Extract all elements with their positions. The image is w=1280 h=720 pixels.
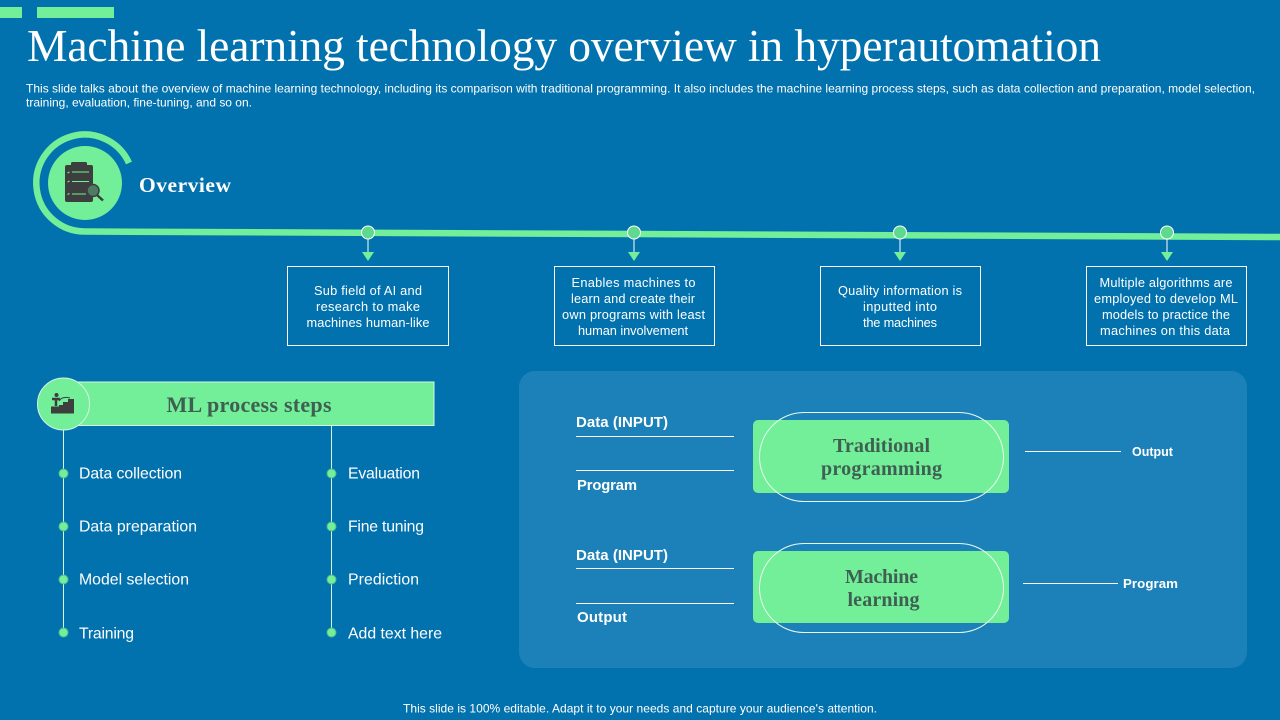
machine learning diagram: Output (577, 609, 627, 626)
steps column 2: Evaluation (348, 466, 420, 482)
traditional programming diagram: Data (INPUT) (576, 414, 668, 431)
machine learning diagram: Machine (845, 566, 918, 588)
description: training, evaluation, fine-tuning, and so on. (26, 96, 252, 110)
heading bar: ML process steps: ML process steps (166, 392, 332, 417)
timeline item 3 (820, 226, 980, 346)
timeline item 1 (288, 226, 448, 346)
timeline item 3: Quality information is (838, 283, 962, 298)
timeline item 2 (554, 226, 714, 346)
steps column 1: Model selection (79, 572, 189, 588)
timeline item 2: learn and create their (571, 291, 696, 306)
overview timeline line (36, 135, 1280, 237)
machine learning diagram: Data (INPUT) (576, 547, 668, 564)
timeline item 1: machines human-like (306, 315, 430, 330)
top accent bars (0, 7, 114, 18)
step lines (64, 426, 332, 632)
steps column 2: Fine tuning (348, 518, 424, 536)
footer note: This slide is 100% editable. Adapt it to your needs and capture your audience's attention. (403, 702, 877, 716)
description (26, 82, 1255, 110)
timeline item 3: the machines (863, 315, 937, 330)
traditional programming diagram (576, 412, 1174, 502)
timeline item 4: machines on this data (1100, 323, 1231, 338)
panel: comparison (519, 371, 1247, 668)
timeline item 1: research to make (316, 299, 420, 314)
traditional programming diagram: Program (577, 478, 637, 494)
traditional programming diagram: programming (821, 458, 942, 480)
timeline item 2: own programs with least (562, 307, 705, 322)
steps column 1: Training (79, 626, 134, 642)
steps column 1: Data collection (79, 466, 182, 482)
timeline item 1: Sub field of AI and (314, 283, 422, 298)
steps column 2 (327, 466, 442, 642)
heading bar: ML process steps (64, 382, 434, 426)
steps column 1 (59, 466, 197, 642)
machine learning diagram: learning (848, 589, 920, 611)
machine learning diagram: Program (1123, 576, 1178, 591)
traditional programming diagram: Output (1132, 445, 1174, 459)
timeline item 4 (1086, 226, 1246, 346)
icon: person climbing steps (38, 378, 90, 430)
icon: clipboard with magnifier (48, 146, 122, 220)
steps column 1: Data preparation (79, 518, 197, 536)
timeline item 4: employed to develop ML (1094, 291, 1238, 306)
timeline item 2: Enables machines to (572, 275, 696, 290)
steps column 2: Prediction (348, 572, 419, 588)
timeline item 4: Multiple algorithms are (1100, 275, 1232, 290)
traditional programming diagram: Traditional (833, 435, 930, 457)
panel: ML process steps (38, 378, 442, 642)
timeline item 3: inputted into (863, 299, 937, 314)
timeline item 4: models to practice the (1102, 307, 1230, 322)
timeline item 2: human involvement (578, 323, 688, 338)
heading: overview: Overview (139, 173, 231, 197)
steps column 2: Add text here (348, 626, 442, 642)
description: This slide talks about the overview of machine learning technology, including its comparison with traditional programming. It also includes the machine learning process steps, such as data collection and preparation, model selection, (26, 82, 1255, 96)
title: Machine learning technology overview in hyperautomation (27, 20, 1101, 71)
machine learning diagram (576, 544, 1178, 632)
